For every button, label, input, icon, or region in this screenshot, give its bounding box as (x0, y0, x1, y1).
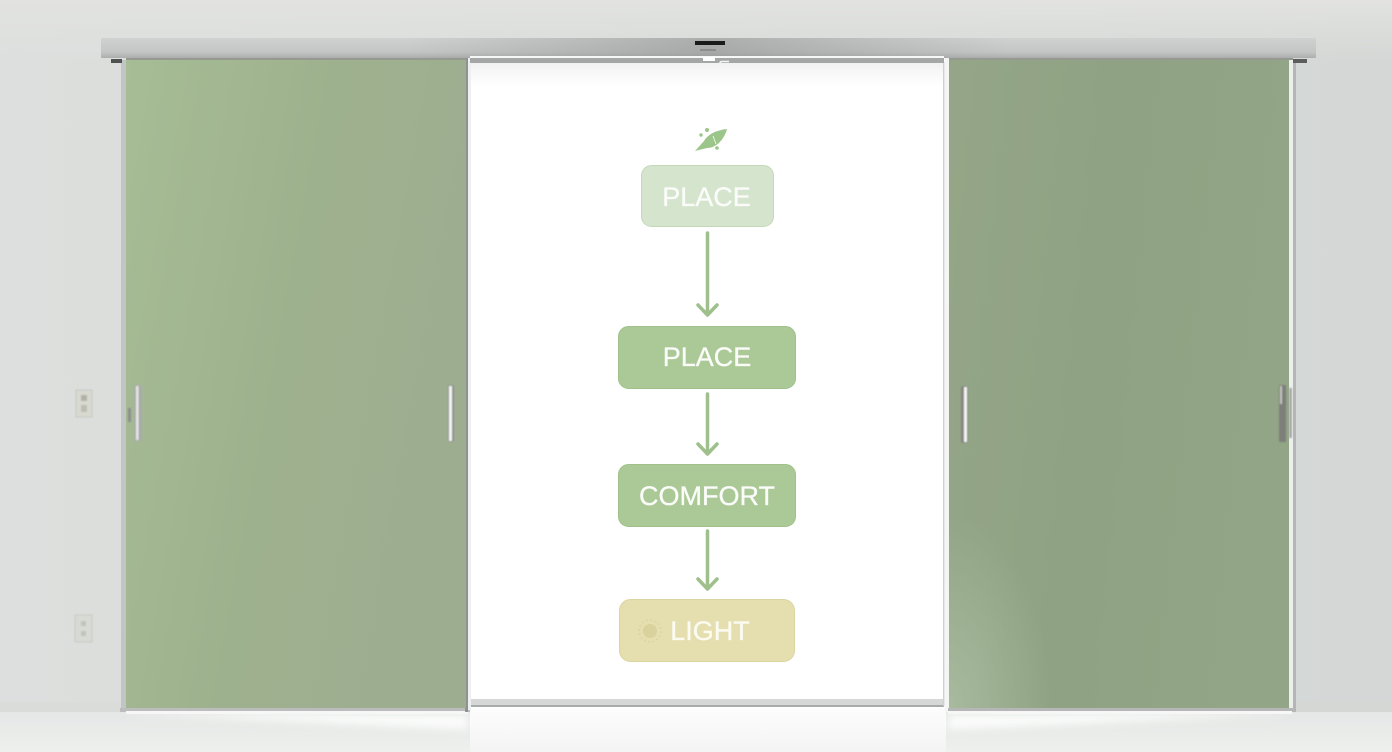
left door outer handle (128, 385, 142, 441)
arrow: first (698, 233, 717, 315)
left door inner handle (448, 385, 454, 442)
right door panel (949, 60, 1289, 708)
box: place (618, 326, 796, 388)
arrow: second (698, 394, 717, 454)
right door outer handle (1279, 385, 1292, 442)
right door inner handle (961, 386, 968, 443)
box: light (620, 600, 794, 662)
box: light: LIGHT (670, 616, 750, 646)
top rail (101, 38, 1316, 63)
flow diagram (618, 128, 796, 662)
wall outlet lower (75, 615, 92, 642)
left door frame (120, 58, 471, 714)
floor (0, 702, 1392, 752)
box: place (pale) (642, 166, 774, 226)
box: comfort: COMFORT (639, 481, 775, 511)
box: comfort (618, 464, 796, 526)
rail sensor (695, 41, 729, 66)
icon: leaf (695, 128, 727, 151)
box: place (pale): PLACE (662, 182, 751, 212)
left door panel (126, 60, 466, 708)
wall outlet upper (76, 390, 92, 417)
arrow: third (698, 531, 717, 589)
central bright opening (468, 58, 948, 708)
icon: sun (639, 620, 661, 642)
box: place: PLACE (663, 342, 751, 372)
right door frame (945, 58, 1296, 714)
